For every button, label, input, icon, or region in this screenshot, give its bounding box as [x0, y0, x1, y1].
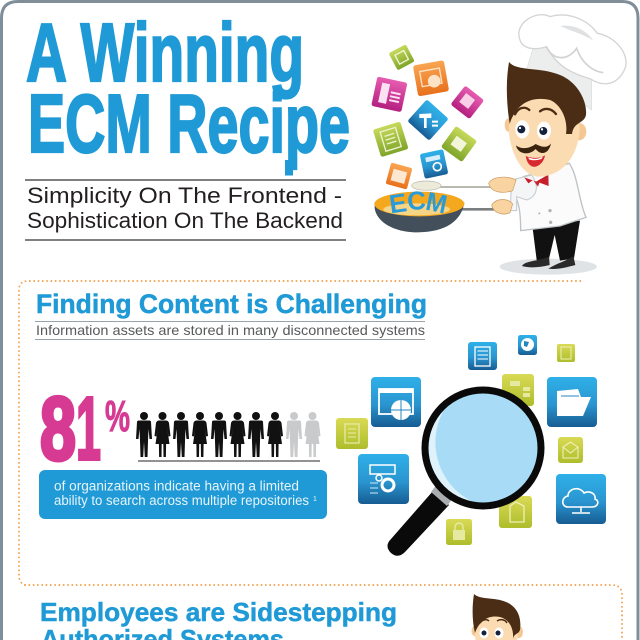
- statistic 81%: [40, 380, 130, 480]
- icon: magnifying glass: [388, 390, 541, 556]
- statistic 81%: 1: [76, 380, 101, 480]
- icon: settings document: [358, 454, 409, 504]
- trousers: [533, 221, 580, 261]
- ECM letters: E: [387, 187, 409, 219]
- frying pan: [374, 185, 495, 232]
- blue callout: 1: [313, 496, 317, 503]
- eyes: [515, 120, 551, 140]
- jacket sleeve: [511, 175, 536, 211]
- character: employee head: [472, 594, 523, 640]
- icon: globe: [518, 335, 537, 355]
- icon cluster with magnifying glass: [336, 335, 606, 556]
- icon: lock: [446, 519, 472, 545]
- spatula: [412, 181, 492, 190]
- icon: form: [499, 496, 532, 528]
- illustration: chef flipping app icons in ECM pan: [371, 15, 626, 275]
- icon: hierarchy: [502, 374, 534, 406]
- people pictogram: 8 of 10 highlighted: [136, 412, 320, 461]
- shoes: [522, 256, 575, 269]
- blue callout: [39, 470, 327, 519]
- title: ECM Recipe: [28, 77, 350, 170]
- ECM letters: [387, 185, 450, 219]
- panel: finding content: [19, 281, 606, 585]
- flying app icons: [371, 44, 484, 189]
- statistic 81%: 8: [40, 380, 76, 480]
- chef jacket: [512, 163, 586, 231]
- subtitle: Simplicity On The Frontend -: [27, 183, 342, 208]
- section subheading: Information assets are stored in many disconnected systems: [36, 322, 425, 338]
- section heading: Finding Content is Challenging: [36, 289, 427, 319]
- icon: pdf: [557, 344, 575, 362]
- icon: cloud: [556, 474, 606, 524]
- face: [509, 95, 580, 177]
- title: [26, 6, 350, 176]
- icon: document list: [468, 342, 497, 370]
- buttons: [538, 209, 552, 224]
- subtitle: [25, 180, 346, 240]
- mouth: [526, 155, 545, 167]
- icon: mail: [558, 437, 583, 463]
- ears: [505, 118, 512, 132]
- hands: [489, 177, 516, 214]
- icon: web: [371, 377, 421, 427]
- statistic 81%: %: [105, 392, 130, 441]
- ECM letters: M: [423, 186, 450, 219]
- hair: [507, 62, 586, 134]
- title: A Winning: [26, 6, 304, 99]
- icon: folder: [547, 377, 597, 427]
- icon: text page: [336, 418, 368, 449]
- eyebrows: [515, 108, 556, 114]
- blue callout: of organizations indicate having a limited: [54, 478, 299, 494]
- red neckerchief: [524, 175, 549, 187]
- ECM letters: C: [406, 185, 427, 216]
- section heading: Employees are Sidestepping: [40, 597, 397, 627]
- subtitle: Sophistication On The Backend: [27, 208, 343, 233]
- floor shadow: [500, 259, 597, 275]
- section heading: [40, 597, 397, 640]
- dotted panel border: [19, 281, 582, 585]
- blue callout: ability to search across multiple repositories: [54, 493, 309, 508]
- chef hat: [519, 15, 626, 110]
- dotted panel border: [25, 585, 622, 640]
- panel: employees sidestepping: [25, 585, 622, 640]
- mustache: [516, 143, 551, 153]
